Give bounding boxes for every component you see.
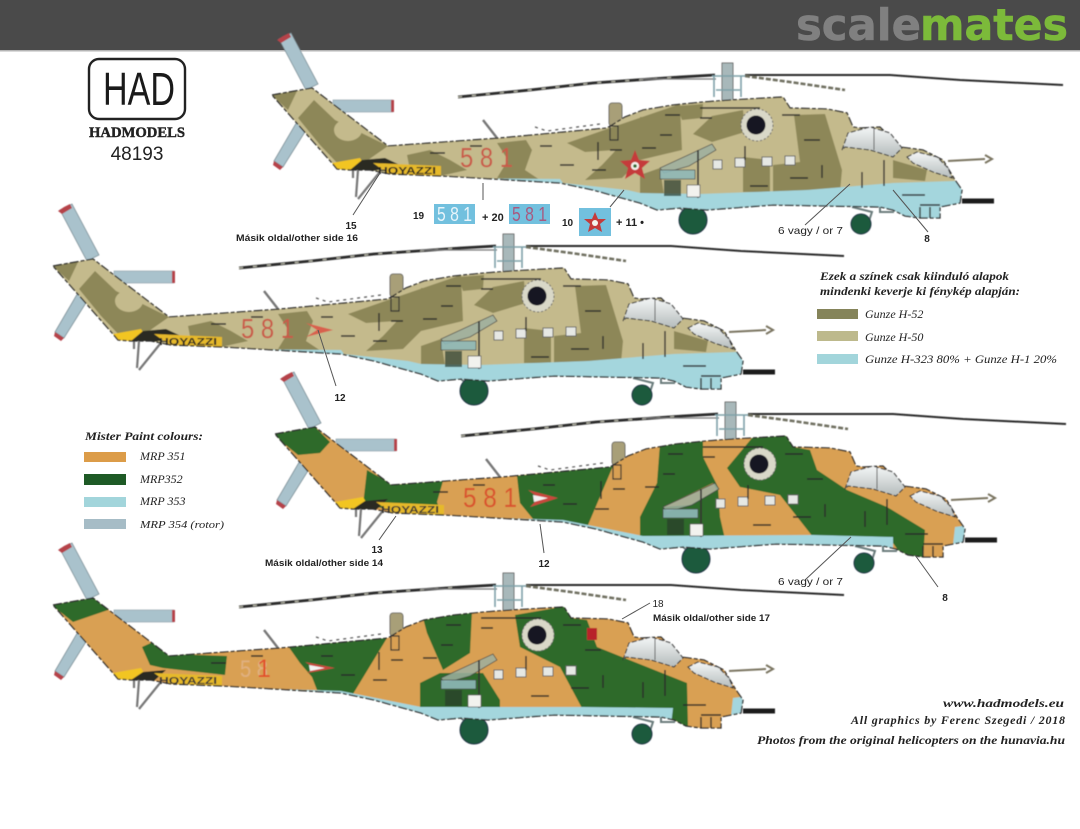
logo: HAD Models 48193: HAD [103,63,175,115]
helicopter 4: orange and green camouflage: 1 [257,655,271,683]
red square marking [587,628,597,640]
colour legend: Mister Paint: MRP 351 [139,449,185,463]
tail code text: HOYAZZI [378,166,436,177]
credits [757,696,1065,747]
colour legend: Mister Paint [84,429,224,531]
decal samples and callouts for helicopter 1: + 20 [482,212,504,224]
callout for helicopter 4 [622,599,770,624]
callouts for helicopter 3: 13 [371,545,383,556]
chevron insignia [306,323,333,337]
decal: star on blue [579,208,611,236]
Hungarian triangle insignia [528,490,558,507]
tail code text: HOYAZZI [159,337,217,348]
callout for helicopter 4: Másik oldal/other side 17 [653,613,770,624]
colour legend: Gunze: Gunze H-323 80% + Gunze H-1 20% [865,352,1057,366]
colour legend: Gunze: mindenki keverje ki fénykép alapján: [820,284,1020,298]
callouts for helicopter 3: 8 [942,593,948,604]
decal samples and callouts for helicopter 1: 6 vagy / or 7 [778,225,843,237]
helicopter 1: sand and olive camouflage, red star [260,33,1063,234]
callouts for helicopter 3: Másik oldal/other side 14 [265,558,384,569]
decal: 581 red on blue: 5 8 1 [512,204,547,226]
colour legend: Gunze [817,269,1057,366]
logo: HAD Models 48193: HADMODELS [89,125,185,141]
decal samples and callouts for helicopter 1: Másik oldal/other side 16 [236,233,358,244]
colour legend: Gunze: Gunze H-50 [865,330,923,344]
callout for helicopter 4: 18 [652,599,664,610]
colour legend: Gunze: Ezek a színek csak kiinduló alapok [819,269,1009,283]
colour legend: Gunze: Gunze H-52 [865,307,923,321]
logo: HAD Models 48193: 48193 [111,144,163,165]
header banner [0,0,1080,52]
decal samples and callouts for helicopter 1: 19 [413,211,425,222]
callouts for helicopter 3: 12 [538,559,550,570]
decal samples and callouts for helicopter 1: 15 [345,221,357,232]
tail code text: HOYAZZI [381,505,439,516]
callout 12 for helicopter 2: 12 [334,393,346,404]
fuselage number: 5 8 1 [460,142,513,173]
colour legend: Mister Paint: MRP 353 [139,494,185,508]
fuselage number: 5 8 1 [463,482,517,513]
colour legend: Mister Paint: MRP 354 (rotor) [139,519,224,531]
helicopter 4: orange and green camouflage [41,543,844,744]
callouts for helicopter 3 [265,516,948,604]
decal samples and callouts for helicopter 1: 10 [562,218,574,229]
callouts for helicopter 3: 6 vagy / or 7 [778,576,843,588]
decal samples and callouts for helicopter 1 [236,173,930,245]
logo: HAD Models 48193 [89,59,185,165]
red star [620,150,650,179]
credits: www.hadmodels.eu [943,696,1064,710]
credits: Photos from the original helicopters on the hunavia.hu [757,733,1065,747]
tail code text: HOYAZZI [159,676,217,687]
header banner: scale [796,0,921,51]
colour legend: Mister Paint: MRP352 [139,472,183,486]
decal samples and callouts for helicopter 1: 8 [924,234,930,245]
callout 12 for helicopter 2 [318,330,346,404]
decal: 581 white on blue: 5 8 1 [437,204,472,226]
fuselage number: 5 8 1 [241,313,294,344]
Hungarian triangle insignia [305,662,335,673]
decal samples and callouts for helicopter 1: + 11 • [616,217,644,229]
helicopter 3: orange and green camouflage [263,372,1066,573]
credits: All graphics by Ferenc Szegedi / 2018 [850,713,1065,727]
fuselage number: 5 8 [240,656,268,683]
helicopter 2: sand and olive camouflage, chevron [41,204,844,405]
header banner: mates [920,0,1068,51]
colour legend: Mister Paint: Mister Paint colours: [84,429,203,443]
